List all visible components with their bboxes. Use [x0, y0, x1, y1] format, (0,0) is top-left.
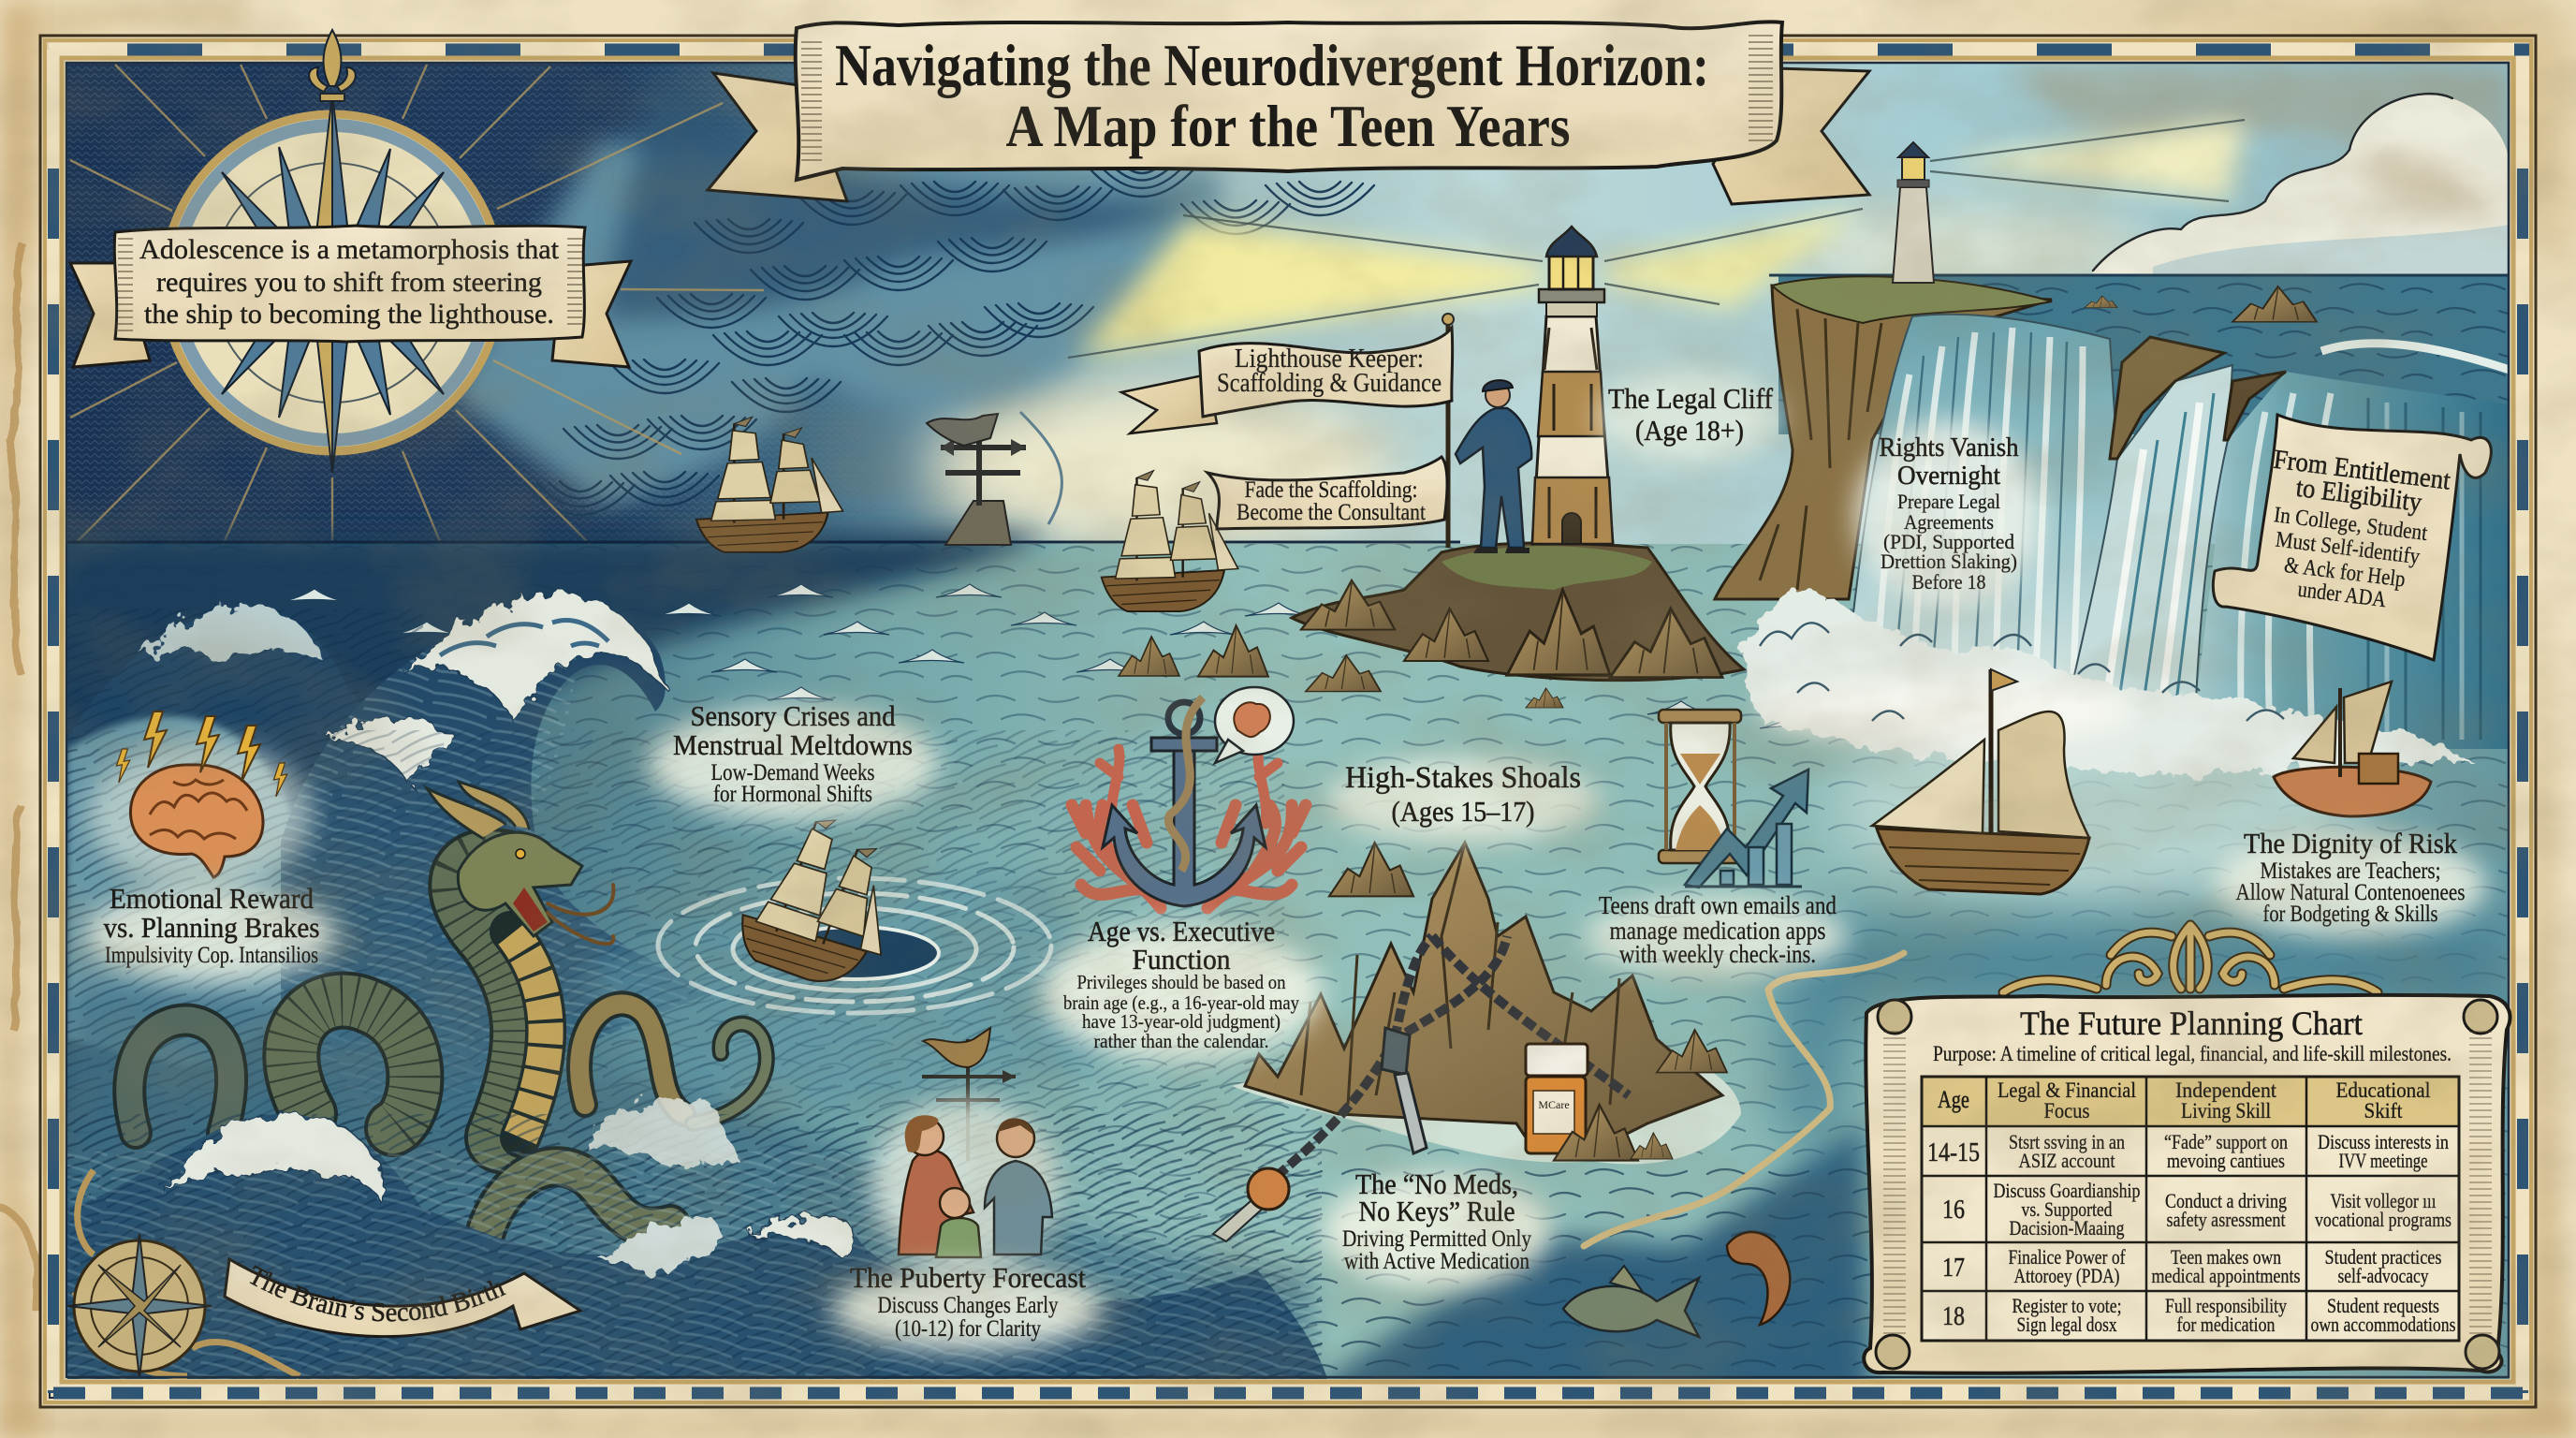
label: high-stakes shoals: High-Stakes Shoals: [1345, 761, 1581, 795]
title banner right tail: [1713, 68, 1869, 204]
scroll: from entitlement to eligibility: under ADA: [2296, 578, 2388, 612]
label: sensory crises and menstrual meltdowns: [648, 699, 938, 819]
small corner compass and scrollwork: [67, 1170, 300, 1378]
chart table: Discuss Goardianship: [1994, 1179, 2140, 1202]
label: high-stakes shoals: [1327, 758, 1599, 843]
churning mid sea: [67, 730, 1310, 1386]
chart table: Living Skill: [2181, 1099, 2271, 1123]
label: the puberty forecast: [832, 1261, 1104, 1351]
scroll: from entitlement to eligibility: Must Self-identify: [2275, 528, 2422, 569]
label: teens draft own emails: [1587, 891, 1849, 976]
chart table: 17: [1942, 1254, 1965, 1283]
label: emotional reward vs planning brakes: Emotional Reward: [110, 882, 314, 915]
chart table: mevoing cantiues: [2167, 1149, 2285, 1172]
quote banner: Adolescence is a metamorphosis that: [139, 234, 560, 265]
serpent neck: [464, 864, 526, 1137]
serpent tongue: [548, 885, 613, 944]
banner: fade the scaffolding: Become the Consultant: [1237, 500, 1426, 525]
pill bottle: [1526, 1077, 1586, 1153]
child: [936, 1218, 981, 1257]
label: rights vanish overnight: Agreements: [1904, 510, 1994, 534]
serpent spiral tail: [693, 1024, 767, 1123]
lighthouse island: [1292, 543, 1744, 681]
left storm waves: [67, 594, 711, 1123]
title banner left tail: [708, 73, 847, 201]
orange key: [1213, 1181, 1284, 1241]
map coastline: [1584, 953, 1904, 1246]
far sea above falls: [1778, 275, 2510, 434]
scroll: from entitlement to eligibility: to Eligibility: [2294, 473, 2423, 518]
label: the dignity of risk: for Bodgeting & Skills: [2263, 902, 2437, 927]
label: sensory crises and menstrual meltdowns: Menstrual Meltdowns: [673, 728, 913, 761]
label: teens draft own emails: Teens draft own emails and: [1599, 891, 1837, 919]
brain icon: [89, 712, 314, 889]
title banner body: [796, 22, 1782, 180]
chart table: Student requests: [2327, 1294, 2439, 1317]
chart table: Finalice Power of: [2009, 1245, 2126, 1269]
label: the dignity of risk: The Dignity of Risk: [2244, 827, 2457, 859]
shoals island: MCare: [1538, 1098, 1570, 1111]
label: age vs executive function: Privileges should be based on: [1076, 971, 1286, 993]
serpent body coil: [291, 1001, 415, 1128]
chart table: Independent: [2175, 1078, 2277, 1102]
right clouds: [2093, 94, 2510, 277]
chart table: vs. Supported: [2022, 1197, 2112, 1221]
label: the legal cliff: (Age 18+): [1635, 414, 1744, 447]
whirlpool: [658, 878, 1051, 1013]
second fall: [2064, 365, 2232, 721]
scroll: from entitlement to eligibility: [2213, 415, 2491, 660]
label: age vs executive function: [1041, 915, 1322, 1060]
quote banner: [70, 226, 631, 367]
family under weathervane: [871, 1028, 1058, 1269]
label: high-stakes shoals: (Ages 15–17): [1391, 795, 1535, 828]
label: the dignity of risk: [2215, 827, 2486, 936]
cliff and falls: [1715, 275, 2510, 777]
chart table: 16: [1942, 1196, 1965, 1225]
waterfall one: [1847, 315, 2117, 693]
spray foam: [1741, 592, 2471, 777]
label: rights vanish overnight: (PDI, Supported: [1883, 530, 2014, 553]
label: rights vanish overnight: Drettion Slaking): [1881, 550, 2017, 573]
chart table: 18: [1942, 1302, 1965, 1331]
chart table: Student practices: [2325, 1245, 2441, 1269]
chart table: Legal & Financial: [1998, 1078, 2136, 1102]
ship sinking in whirlpool: [730, 801, 919, 1000]
waterfall three: [2190, 372, 2510, 749]
chart table: Conduct a driving: [2165, 1189, 2287, 1212]
raft with treasure: [2274, 682, 2431, 816]
sea base: [37, 534, 2510, 1404]
label: emotional reward vs planning brakes: Impulsivity Cop. Intansilios: [105, 943, 318, 968]
label: rights vanish overnight: Rights Vanish: [1880, 433, 2019, 462]
chart table: safety asressment: [2166, 1208, 2286, 1231]
anchor: [1103, 740, 1266, 906]
small rocks: [1119, 625, 1563, 896]
scroll: from entitlement to eligibility: & Ack for Help: [2283, 553, 2407, 593]
banner: fade the scaffolding: Fade the Scaffolding:: [1245, 477, 1417, 503]
label: sensory crises and menstrual meltdowns: Low-Demand Weeks: [711, 760, 874, 785]
label: the legal cliff: [1596, 370, 1783, 463]
chain: [1250, 936, 1629, 1200]
title banner: Navigating the Neurodivergent Horizon:: [835, 32, 1709, 98]
label: the puberty forecast: The Puberty Forecast: [850, 1261, 1086, 1294]
chart table: self-advocacy: [2338, 1264, 2428, 1287]
serpent right coils: [579, 1004, 683, 1114]
fleur-de-lis: [309, 30, 356, 101]
serpent belly: [510, 932, 546, 1137]
shoals island: [1213, 843, 1741, 1241]
banner: lighthouse keeper: Lighthouse Keeper:: [1235, 345, 1424, 374]
label: age vs executive function: have 13-year-old judgment): [1082, 1010, 1281, 1033]
label: the puberty forecast: (10-12) for Clarity: [895, 1316, 1041, 1342]
chart table: IVV meetinge: [2338, 1149, 2428, 1172]
label: age vs executive function: brain age (e.g., a 16-year-old may: [1063, 991, 1299, 1014]
label: emotional reward vs planning brakes: vs. Planning Brakes: [103, 911, 320, 944]
chart table: Register to vote;: [2012, 1294, 2121, 1317]
label: age vs executive function: rather than the calendar.: [1093, 1030, 1269, 1052]
key: [1382, 1028, 1410, 1075]
label: no meds no keys: with Active Medication: [1344, 1249, 1530, 1274]
weathervane on rock: [927, 414, 1026, 545]
scroll: from entitlement to eligibility: In College, Student: [2273, 503, 2429, 546]
label: emotional reward vs planning brakes: [85, 882, 338, 981]
anchor and coral: [1072, 687, 1306, 908]
sea creature: [1727, 1232, 1790, 1325]
distant sea rocks: [2232, 286, 2317, 322]
chart table: Stsrt ssving in an: [2009, 1130, 2125, 1153]
label: the puberty forecast: Discuss Changes Early: [878, 1293, 1059, 1318]
center rock between falls: [2110, 337, 2224, 459]
chart table: ASIZ account: [2018, 1149, 2115, 1172]
label: rights vanish overnight: Before 18: [1911, 570, 1986, 594]
label: age vs executive function: Function: [1133, 943, 1231, 976]
label: sensory crises and menstrual meltdowns: Sensory Crises and: [691, 699, 896, 732]
chart table: Attoroey (PDA): [2014, 1264, 2119, 1287]
title banner: A Map for the Teen Years: [1005, 93, 1571, 159]
label: sensory crises and menstrual meltdowns: for Hormonal Shifts: [713, 782, 872, 807]
dragon sea serpent: [129, 782, 767, 1245]
chart table: Dacision-Maaing: [2009, 1216, 2125, 1240]
fish: [1563, 1266, 1699, 1337]
chart table: Focus: [2044, 1099, 2090, 1123]
chart table: Visit vollegor ııı: [2331, 1189, 2436, 1212]
chart table: medical appointments: [2151, 1264, 2301, 1287]
foreground breaking waves: [67, 1101, 1329, 1386]
scroll: from entitlement to eligibility: From Entitlement: [2272, 445, 2452, 496]
serpent horns: [427, 782, 529, 838]
mother: [899, 1151, 973, 1255]
chart table: Teen makes own: [2171, 1245, 2281, 1269]
serpent bottom coil: [482, 1167, 670, 1245]
chart table: [1922, 1077, 2459, 1341]
storm clouds: [449, 84, 1374, 524]
chart table: 14-15: [1927, 1138, 1980, 1167]
label: no meds no keys: No Keys” Rule: [1359, 1195, 1515, 1227]
chart table: Skift: [2364, 1099, 2403, 1123]
thought bubble with brain: [1215, 687, 1294, 755]
chart title: The Future Planning Chart: [2020, 1005, 2363, 1042]
quote banner: the ship to becoming the lighthouse.: [144, 299, 554, 330]
banner: lighthouse keeper: Scaffolding & Guidance: [1217, 369, 1442, 398]
small lighthouse: [1893, 142, 1934, 283]
label: rights vanish overnight: Overnight: [1897, 461, 2000, 491]
small rock between falls: [2224, 372, 2286, 440]
label: no meds no keys: [1323, 1167, 1551, 1289]
label: the dignity of risk: Allow Natural Contenoenees: [2235, 880, 2466, 905]
light beams: [1068, 120, 2245, 358]
cliff top grass: [1772, 276, 2052, 323]
serpent far left coil: [129, 1020, 231, 1133]
label: rights vanish overnight: [1855, 421, 2042, 609]
ornament above chart: [2003, 925, 2378, 992]
chart table: “Fade” support on: [2164, 1130, 2288, 1153]
future planning chart scroll: [1864, 995, 2510, 1373]
chart table: Full responsibility: [2165, 1294, 2287, 1317]
chart table: Educational: [2336, 1078, 2430, 1102]
main compass rose: [164, 30, 501, 473]
label: teens draft own emails: manage medication apps: [1610, 917, 1825, 945]
chart table: Age: [1938, 1086, 1969, 1113]
quote banner: requires you to shift from steering: [156, 267, 542, 298]
rays from compass: [70, 65, 764, 564]
label: the dignity of risk: Mistakes are Teachers;: [2260, 858, 2441, 884]
sky: [67, 64, 2510, 552]
chart purpose line: Purpose: A timeline of critical legal, financial, and life-skill milestones.: [1933, 1042, 2452, 1065]
cliff face: [1715, 286, 2052, 599]
hourglass and rising chart: [1659, 710, 1808, 888]
chart table: Discuss interests in: [2318, 1130, 2449, 1153]
chart table: own accommodations: [2310, 1313, 2456, 1336]
label: the legal cliff: The Legal Cliff: [1608, 382, 1774, 415]
lighthouse keeper figure: [1442, 314, 1531, 553]
distant ship: [696, 417, 842, 552]
sailing ship: [1102, 471, 1238, 611]
father: [985, 1161, 1052, 1255]
foreground rocks: [1554, 1105, 1638, 1161]
chart table: for medication: [2177, 1313, 2275, 1336]
chart table: Sign legal dosx: [2016, 1313, 2117, 1336]
chart table: vocational programs: [2315, 1208, 2452, 1231]
distant wave crests: [281, 584, 1825, 728]
banner: the brain's second birth: [223, 1256, 584, 1339]
banner: fade the scaffolding: [1208, 457, 1447, 529]
main lighthouse: [1532, 227, 1613, 544]
label: teens draft own emails: with weekly check-ins.: [1619, 940, 1816, 968]
title banner: [708, 22, 1869, 204]
banner: the brain's second birth: The Brain’s Second Birth: [249, 1265, 506, 1322]
serpent head: [458, 832, 582, 936]
label: no meds no keys: Driving Permitted Only: [1342, 1226, 1531, 1252]
large sailboat: [1872, 669, 2089, 894]
label: no meds no keys: The “No Meds,: [1355, 1167, 1518, 1200]
label: rights vanish overnight: Prepare Legal: [1897, 490, 2000, 513]
banner: lighthouse keeper: [1121, 328, 1453, 433]
label: age vs executive function: Age vs. Executive: [1088, 915, 1275, 947]
